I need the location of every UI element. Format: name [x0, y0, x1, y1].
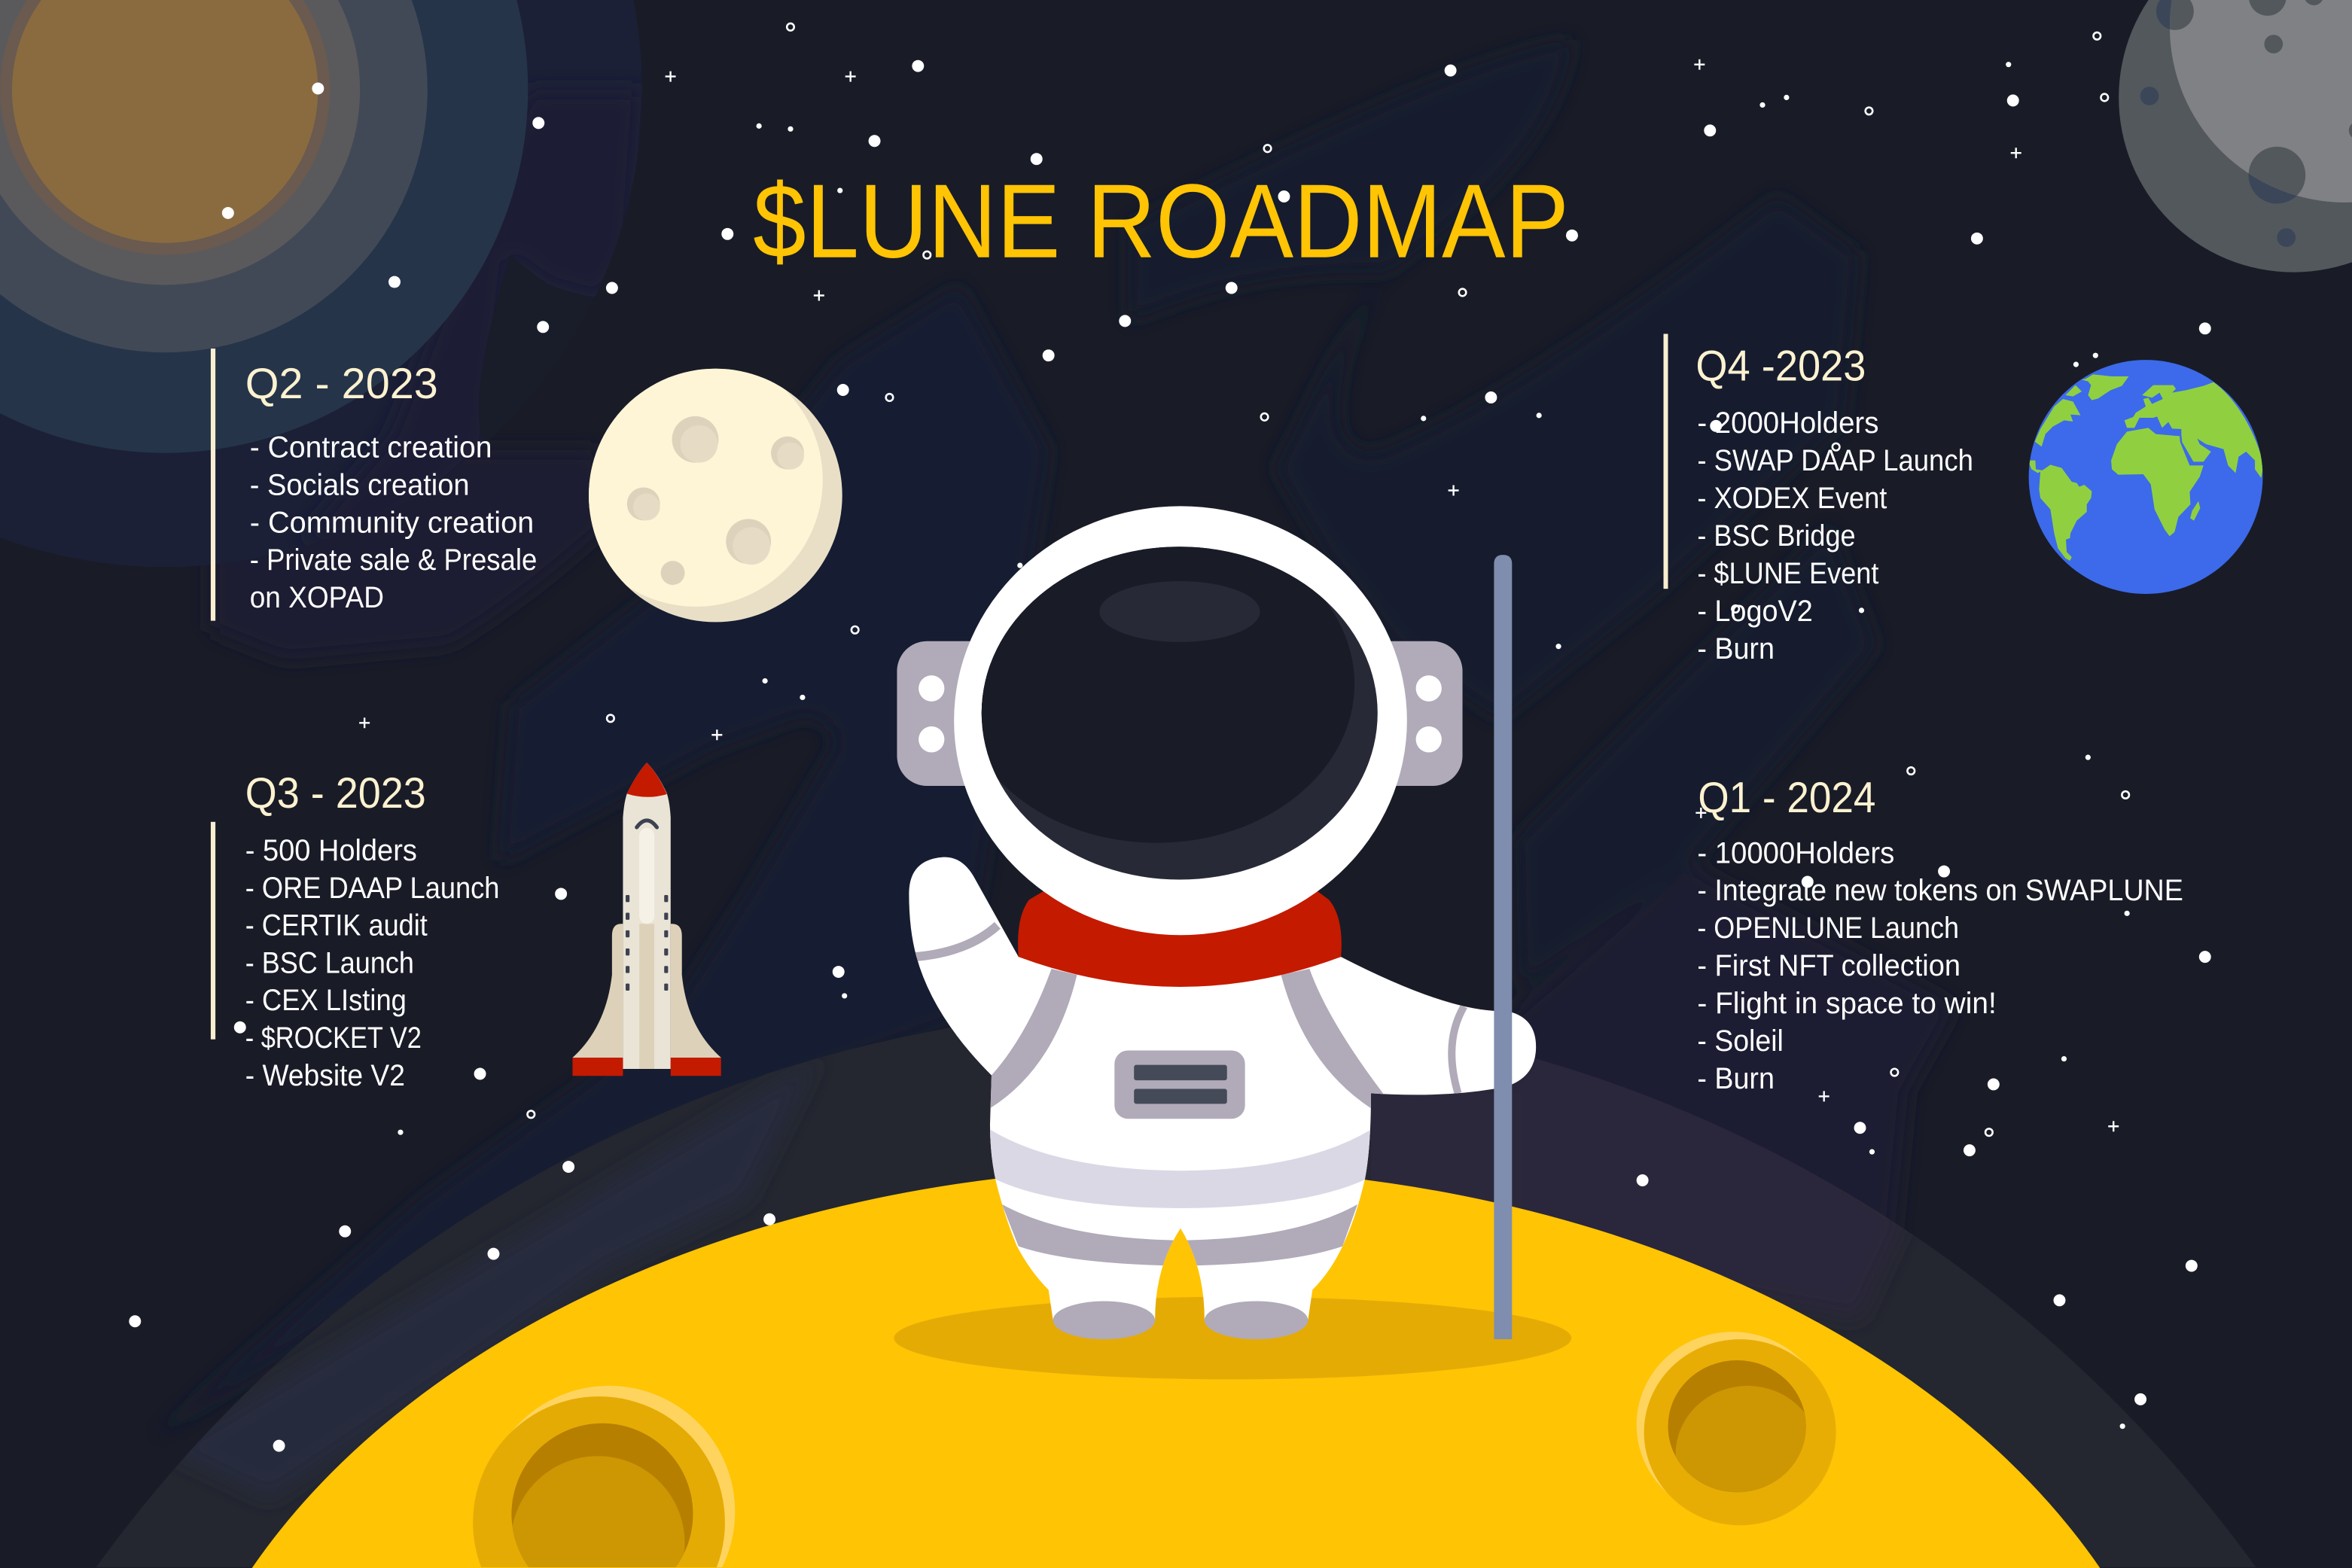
planet: yellow ground — [252, 1168, 2100, 1568]
panel: Q2 2023: - Private sale & Presale — [250, 543, 537, 577]
panel: Q1 2024: - First NFT collection — [1697, 949, 1961, 982]
panel: Q3 2023 — [211, 769, 499, 1092]
crater: right — [1637, 1332, 1836, 1525]
chest control box — [1114, 1050, 1245, 1119]
panel: Q4 2023: - Burn — [1697, 632, 1775, 665]
helmet ear pieces — [897, 641, 1463, 786]
panel: Q2 2023 — [211, 349, 537, 621]
nebula clouds — [150, 39, 1956, 1440]
crater: left — [473, 1386, 735, 1567]
red scarf — [1018, 891, 1342, 987]
panel: Q4 2023: - 2000Holders — [1697, 406, 1878, 440]
astronaut suit — [909, 857, 1536, 1320]
panel: Q1 2024: - OPENLUNE Launch — [1697, 912, 1959, 945]
earth — [2028, 360, 2264, 594]
panel: Q2 2023: - Socials creation — [250, 468, 470, 501]
cream moon — [589, 369, 842, 622]
panel: Q1 2024: - 10000Holders — [1697, 836, 1894, 869]
panel: Q3 2023: - $ROCKET V2 — [245, 1021, 422, 1055]
panel: Q1 2024 — [1697, 774, 2183, 1095]
panel: Q1 2024: - Burn — [1697, 1062, 1775, 1095]
panel: Q3 2023: - 500 Holders — [245, 834, 417, 867]
rocket — [572, 763, 721, 1076]
panel: Q1 2024: - Flight in space to win! — [1697, 987, 1997, 1020]
panel: Q4 2023: - BSC Bridge — [1697, 519, 1856, 553]
suit stripes — [915, 925, 1464, 1266]
panel: Q2 2023: - Contract creation — [250, 431, 492, 464]
panel: Q2 2023: on XOPAD — [250, 581, 384, 614]
planet: grey moon top right — [2119, 0, 2352, 272]
astronaut ground shadow — [894, 1297, 1571, 1379]
panel: Q4 2023: - XODEX Event — [1697, 482, 1887, 515]
panel: Q3 2023: - CERTIK audit — [245, 909, 428, 942]
planet: orange with rings — [0, 0, 642, 567]
panel: Q3 2023: - Website V2 — [245, 1059, 405, 1092]
panel: Q2 2023: - Community creation — [250, 506, 534, 539]
rocket nose — [626, 763, 667, 797]
rocket window arc — [637, 821, 657, 827]
panel: Q4 2023: Q4 -2023 — [1695, 342, 1866, 390]
helmet — [954, 506, 1407, 935]
rocket rivets — [626, 895, 668, 991]
astronaut — [894, 506, 1571, 1379]
rocket body — [623, 763, 671, 1069]
panel: Q4 2023: - SWAP DAAP Launch — [1697, 444, 1973, 477]
panel: Q1 2024: - Integrate new tokens on SWAPLUNE — [1697, 874, 2183, 907]
panel: Q3 2023: - BSC Launch — [245, 946, 414, 979]
panel: Q1 2024: Q1 - 2024 — [1698, 774, 1875, 822]
rocket red fins — [572, 1058, 721, 1076]
astronaut feet — [1053, 1302, 1155, 1339]
panel: Q3 2023: Q3 - 2023 — [245, 769, 426, 817]
title: $LUNE ROADMAP — [753, 163, 1569, 280]
panel: Q4 2023: - LogoV2 — [1697, 595, 1813, 628]
panel: Q4 2023 — [1664, 333, 1973, 665]
flag pole — [1494, 555, 1512, 1339]
panel: Q1 2024: - Soleil — [1697, 1025, 1784, 1058]
panel: Q3 2023: - ORE DAAP Launch — [245, 872, 499, 905]
planet: grey ground halo — [96, 1008, 2256, 1567]
panel: Q4 2023: - $LUNE Event — [1697, 557, 1878, 590]
panel: Q2 2023: Q2 - 2023 — [245, 360, 438, 408]
panel: Q3 2023: - CEX LIsting — [245, 984, 407, 1017]
rocket wings — [572, 924, 721, 1058]
